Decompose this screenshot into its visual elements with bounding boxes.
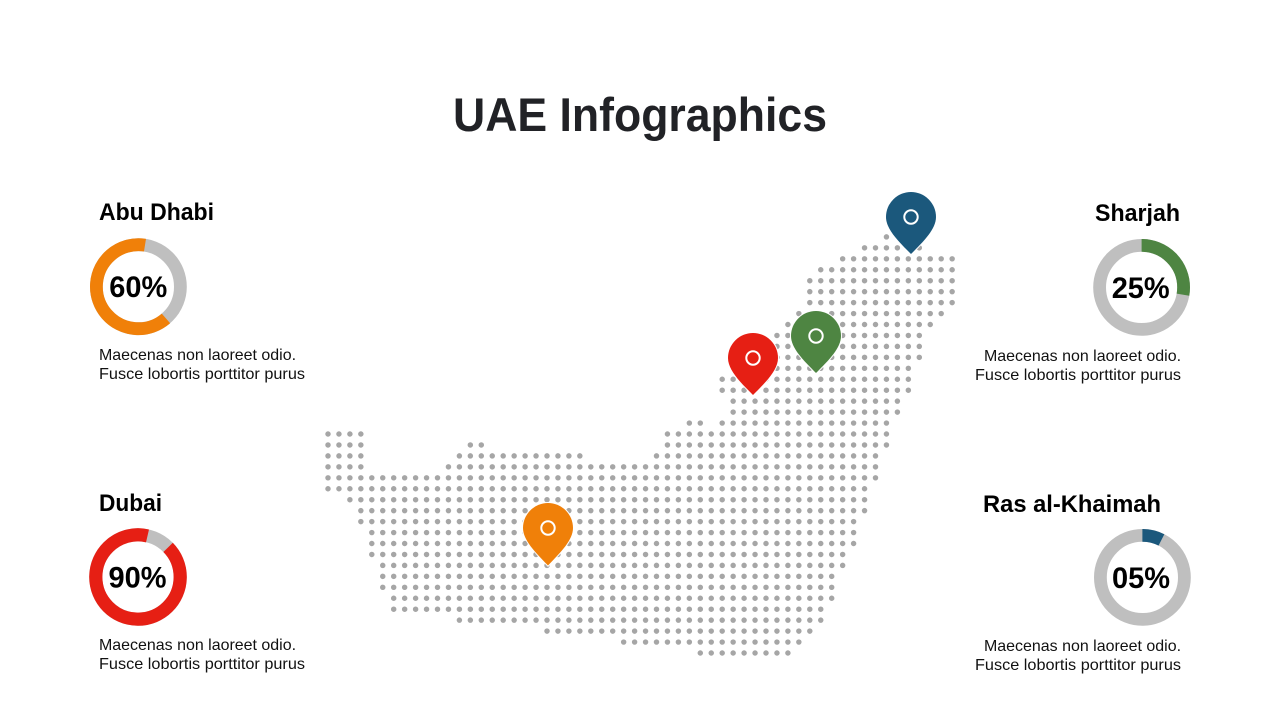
description: Fusce lobortis porttitor purus bbox=[975, 657, 1181, 674]
description: Maecenas non laoreet odio. bbox=[984, 638, 1181, 655]
description: Maecenas non laoreet odio. bbox=[99, 347, 296, 364]
description: Fusce lobortis porttitor purus bbox=[99, 366, 305, 383]
heading: Abu Dhabi: Abu Dhabi bbox=[99, 199, 214, 226]
heading: Ras al-Khaimah: Ras al-Khaimah bbox=[983, 491, 1161, 518]
donut chart: 25% bbox=[1100, 245, 1184, 329]
panel: Dubai bbox=[78, 490, 305, 673]
description: Fusce lobortis porttitor purus bbox=[99, 656, 305, 673]
pin: Abu Dhabi (orange) bbox=[523, 503, 573, 566]
description: Fusce lobortis porttitor purus bbox=[975, 367, 1181, 384]
donut chart: 90% bbox=[78, 517, 198, 637]
panel: Abu Dhabi bbox=[79, 199, 305, 383]
description bbox=[975, 348, 1181, 384]
value: 60%: 60% bbox=[109, 271, 167, 304]
description: Maecenas non laoreet odio. bbox=[99, 637, 296, 654]
value: 25%: 25% bbox=[1112, 272, 1170, 305]
pin: Dubai (red) bbox=[728, 333, 778, 395]
pin: Sharjah (green) bbox=[791, 311, 841, 373]
heading: Dubai: Dubai bbox=[99, 490, 162, 517]
pin: Ras al-Khaimah (blue) bbox=[886, 192, 936, 254]
donut chart: 05% bbox=[1100, 535, 1184, 619]
value: 05%: 05% bbox=[1112, 562, 1170, 595]
description bbox=[975, 638, 1181, 674]
panel: Sharjah bbox=[975, 200, 1184, 384]
title: UAE Infographics bbox=[453, 88, 827, 141]
description: Maecenas non laoreet odio. bbox=[984, 348, 1181, 365]
donut chart: 60% bbox=[79, 227, 198, 346]
description bbox=[99, 637, 305, 673]
value: 90%: 90% bbox=[108, 562, 166, 594]
heading: Sharjah: Sharjah bbox=[1095, 200, 1180, 227]
panel: Ras al-Khaimah bbox=[975, 491, 1184, 674]
description bbox=[99, 347, 305, 383]
dotted map of the UAE bbox=[328, 237, 952, 653]
